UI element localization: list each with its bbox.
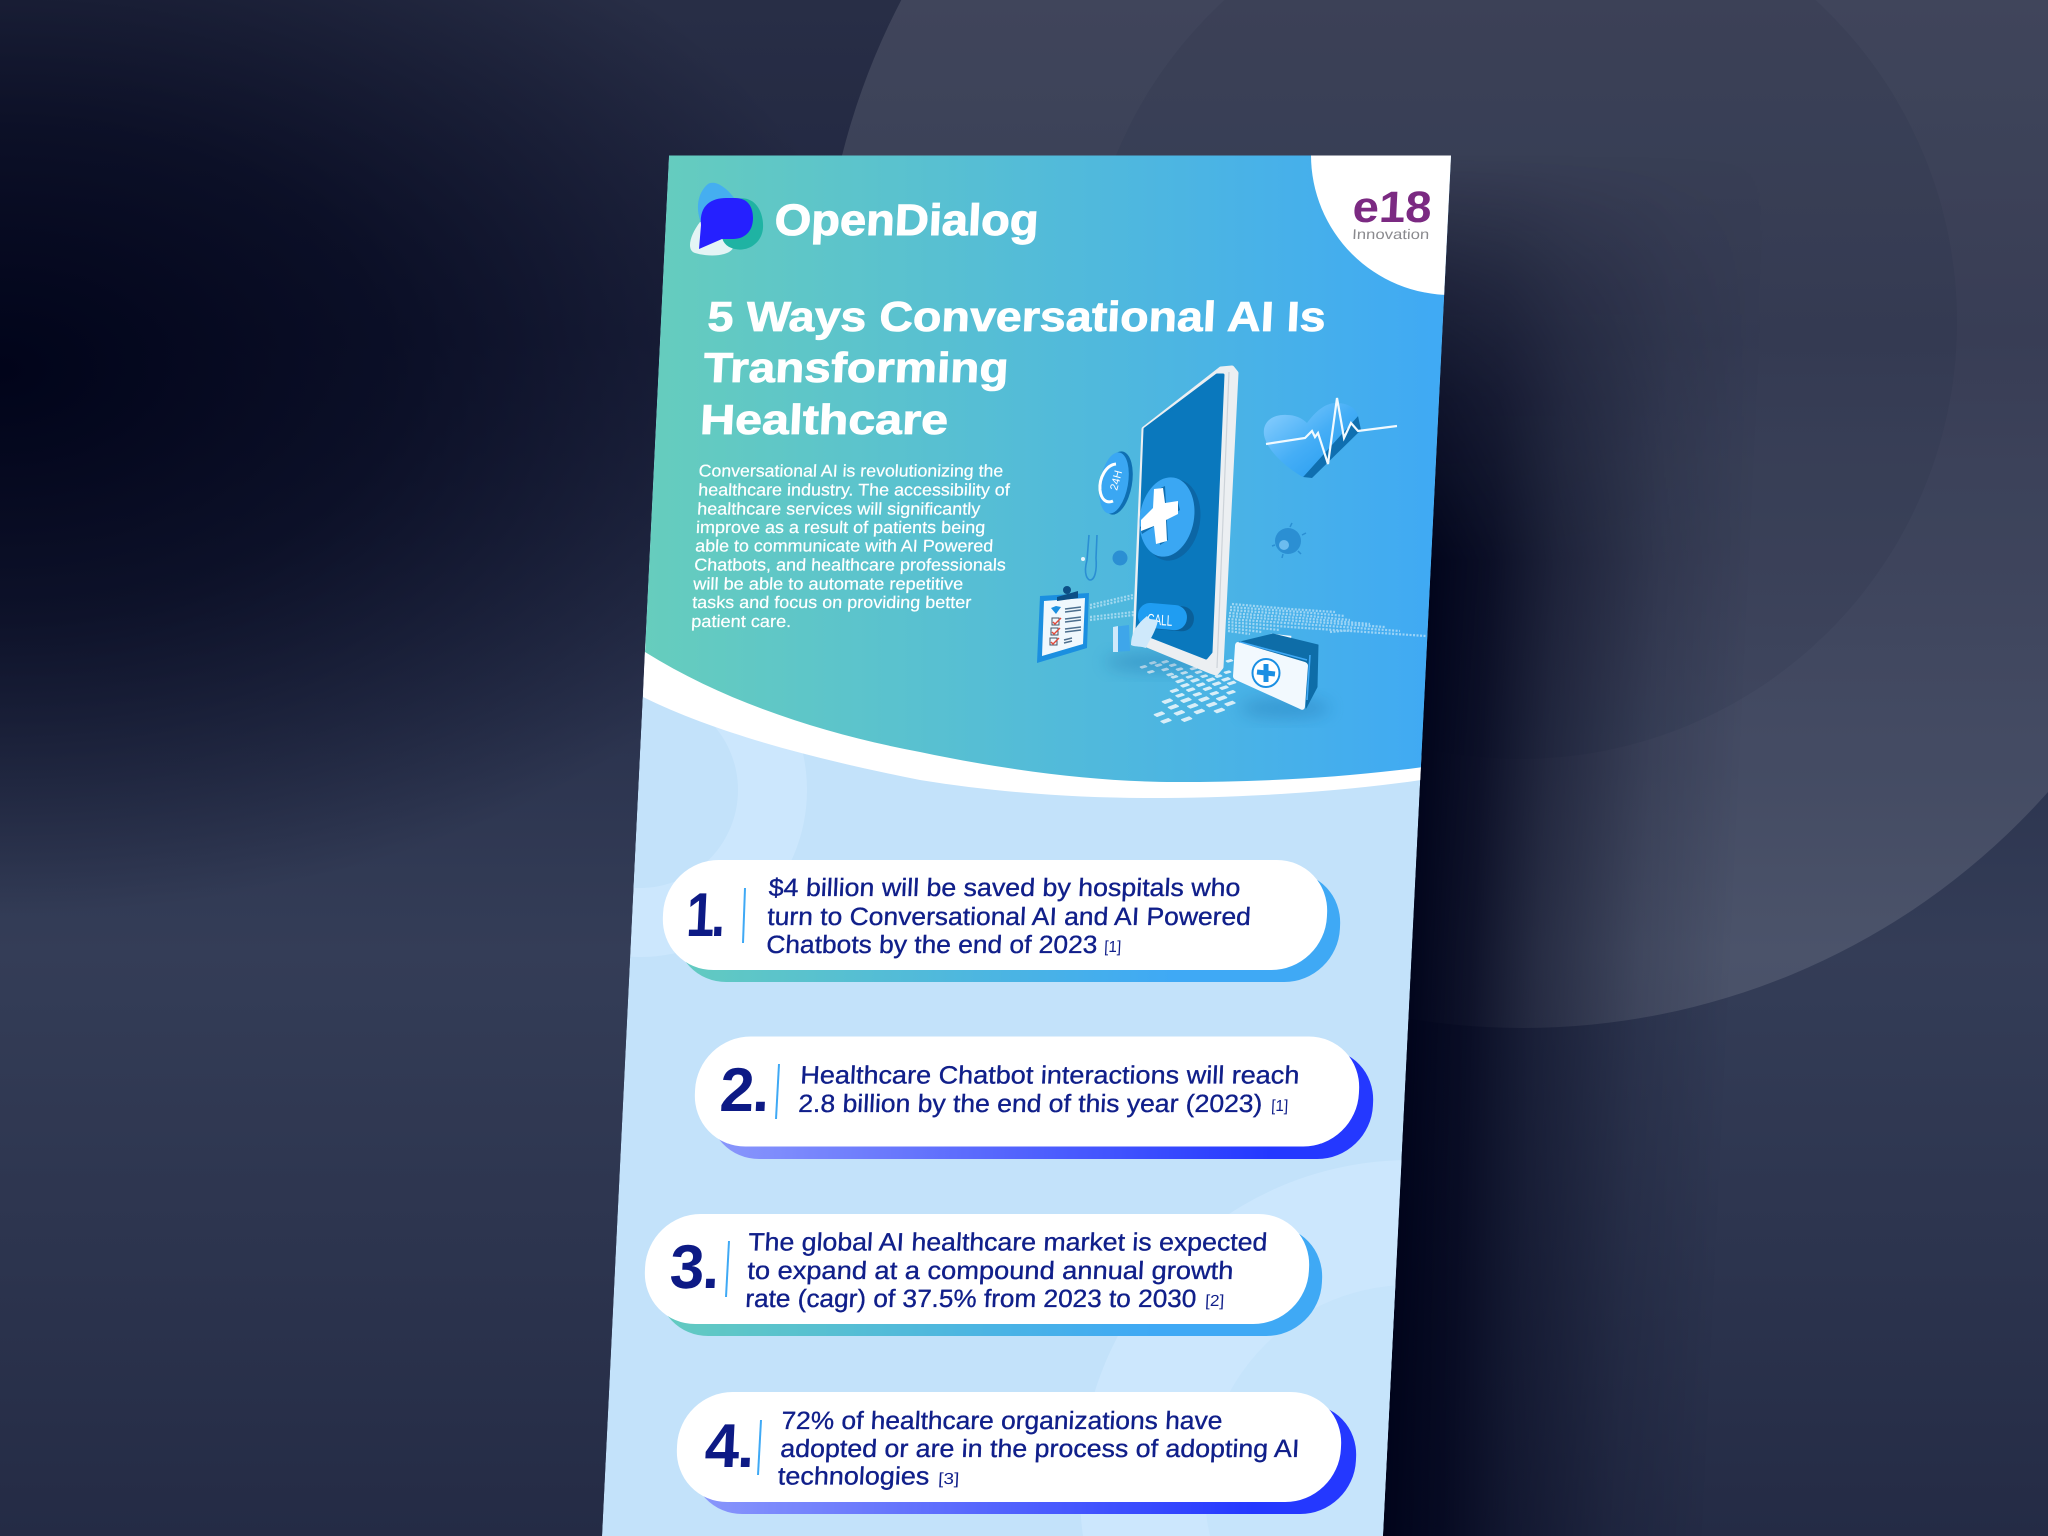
- card 3 text: to expand at a compound annual growth: [747, 1257, 1234, 1285]
- heart with ecg: [1264, 398, 1397, 478]
- dotted world map: [1090, 595, 1426, 636]
- logo: OpenDialog: [690, 183, 1040, 255]
- wordmark: OpenDialog: [774, 196, 1040, 245]
- card 1 shadow: [673, 872, 1343, 982]
- card 2 number: 2.: [718, 1056, 771, 1125]
- card 2 text: [1]: [1271, 1098, 1289, 1115]
- card 4 text: [777, 1407, 1300, 1490]
- card 2 text: [798, 1062, 1300, 1118]
- header gradient: [645, 156, 1451, 782]
- virus large: [1272, 523, 1306, 558]
- phone: [1113, 368, 1236, 673]
- call button: [1137, 602, 1195, 632]
- illustration: medical phone scene: [1037, 368, 1426, 723]
- plus button: [1133, 473, 1207, 565]
- 24h badge: [1095, 449, 1137, 517]
- card 1 text: turn to Conversational AI and AI Powered: [767, 903, 1252, 931]
- title: 5 Ways Conversational AI Is: [707, 293, 1327, 340]
- card 1: [660, 860, 1343, 982]
- card 2: [692, 1036, 1376, 1159]
- decorative rings: [630, 698, 1402, 1536]
- card 3 number: 3.: [668, 1233, 721, 1302]
- card 4 number: 4.: [703, 1412, 756, 1481]
- intro paragraph: healthcare industry. The accessibility of: [698, 481, 1011, 500]
- dotted floor: [1140, 660, 1236, 723]
- logo: e18 Innovation: e18: [1352, 183, 1433, 232]
- title: [699, 293, 1327, 443]
- card 1 pill: [660, 860, 1330, 970]
- card 2 text: 2.8 billion by the end of this year (2023): [798, 1090, 1263, 1118]
- intro paragraph: improve as a result of patients being: [696, 518, 986, 537]
- card 4 text: 72% of healthcare organizations have: [781, 1407, 1223, 1435]
- virus small: [1112, 550, 1128, 566]
- poster body background: [602, 156, 1451, 1536]
- card 3 pill: [642, 1214, 1312, 1324]
- e18 corner circle: [1311, 156, 1451, 295]
- card 2 shadow: [706, 1049, 1376, 1159]
- card 1 text: $4 billion will be saved by hospitals who: [768, 874, 1241, 902]
- card 3 text: [2]: [1205, 1293, 1225, 1310]
- hand: [1113, 616, 1158, 652]
- clipboard: [1037, 586, 1089, 663]
- ground shadow: [1105, 652, 1215, 672]
- card 4 shadow: [689, 1404, 1359, 1514]
- intro paragraph: Chatbots, and healthcare professionals: [694, 556, 1006, 575]
- card 2 text: Healthcare Chatbot interactions will reach: [800, 1062, 1300, 1090]
- card 1 number: 1.: [685, 881, 727, 950]
- icon: chat blobs: [690, 183, 763, 255]
- card 1 text: [766, 874, 1252, 959]
- card 4 pill: [674, 1392, 1344, 1502]
- title: Healthcare: [699, 396, 949, 443]
- stethoscope: [1081, 535, 1097, 580]
- intro paragraph: tasks and focus on providing better: [692, 593, 972, 612]
- intro paragraph: Conversational AI is revolutionizing the: [698, 462, 1004, 481]
- intro paragraph: able to communicate with AI Powered: [695, 537, 994, 556]
- card 4: [674, 1392, 1359, 1514]
- call button: CALL: [1147, 611, 1173, 630]
- title: Transforming: [703, 344, 1010, 391]
- white wave band: [643, 640, 1423, 798]
- first aid case: [1233, 634, 1330, 718]
- poster: [602, 156, 1451, 1536]
- intro paragraph: [691, 462, 1011, 631]
- card 1 text: Chatbots by the end of 2023: [766, 931, 1098, 959]
- card 3 text: rate (cagr) of 37.5% from 2023 to 2030: [745, 1285, 1197, 1313]
- card 3 shadow: [655, 1226, 1325, 1336]
- logo: e18 Innovation: Innovation: [1352, 226, 1430, 242]
- 24h badge: 24H: [1108, 469, 1125, 492]
- card 3 text: [745, 1229, 1268, 1313]
- intro paragraph: will be able to automate repetitive: [692, 575, 964, 593]
- card 4 text: adopted or are in the process of adopting AI: [780, 1435, 1300, 1463]
- card 4 text: [3]: [938, 1471, 960, 1488]
- card 3 text: The global AI healthcare market is expected: [748, 1229, 1268, 1257]
- card 4 text: technologies: [777, 1463, 930, 1490]
- intro paragraph: healthcare services will significantly: [697, 500, 981, 519]
- intro paragraph: patient care.: [691, 612, 792, 631]
- card 1 text: [1]: [1104, 939, 1122, 956]
- card 2 pill: [692, 1036, 1362, 1146]
- card 3: [642, 1214, 1325, 1336]
